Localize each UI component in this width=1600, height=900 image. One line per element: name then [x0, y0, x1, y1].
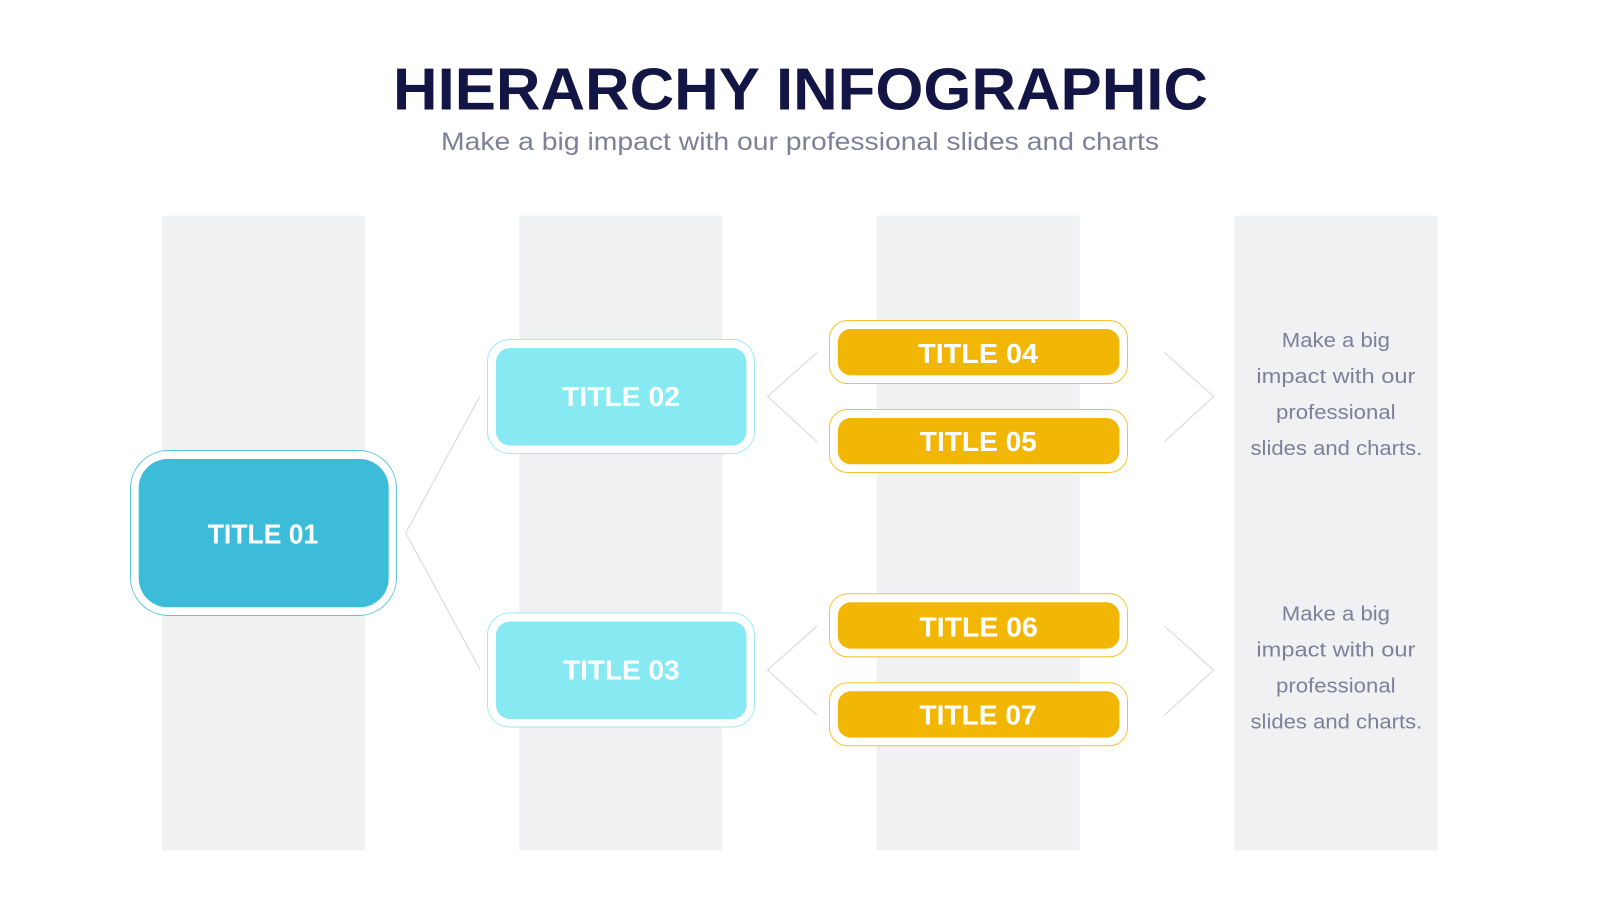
box: title 06 — [830, 594, 1128, 657]
box: title 02: TITLE 02 — [562, 381, 680, 412]
text block: upper description — [1250, 330, 1422, 460]
subtitle: Make a big impact with our professional slides and charts — [441, 128, 1159, 156]
box: title 01 — [130, 450, 396, 616]
text block: lower description: professional — [1276, 676, 1396, 698]
connector: title 01 to 02 and 03 — [406, 396, 480, 670]
title: HIERARCHY INFOGRAPHIC — [393, 56, 1208, 122]
text block: lower description — [1250, 604, 1422, 734]
text block: lower description: impact with our — [1256, 640, 1416, 662]
box: title 02 — [488, 340, 754, 454]
box: title 07 — [830, 683, 1128, 746]
text block: lower description: Make a big — [1282, 604, 1390, 626]
connector: titles 04 and 05 to text — [1164, 352, 1214, 442]
box: title 01: TITLE 01 — [208, 518, 318, 549]
text block: upper description: professional — [1276, 402, 1396, 424]
box: title 05: TITLE 05 — [920, 426, 1037, 457]
connector: title 02 to 04 and 05 — [768, 352, 817, 442]
box: title 04: TITLE 04 — [918, 338, 1039, 369]
connector: title 03 to 06 and 07 — [768, 626, 817, 715]
text block: upper description: slides and charts. — [1250, 438, 1422, 460]
box: title 03 — [488, 613, 754, 727]
box: title 03: TITLE 03 — [563, 654, 680, 686]
text block: upper description: Make a big — [1282, 330, 1390, 352]
box: title 05 — [830, 410, 1128, 472]
box: title 04 — [830, 320, 1128, 384]
box: title 07: TITLE 07 — [919, 700, 1037, 730]
text block: upper description: impact with our — [1256, 366, 1416, 388]
column backgrounds — [162, 216, 1438, 850]
connector: titles 06 and 07 to text — [1164, 626, 1214, 715]
box: title 06: TITLE 06 — [919, 612, 1038, 642]
text block: lower description: slides and charts. — [1250, 712, 1422, 734]
